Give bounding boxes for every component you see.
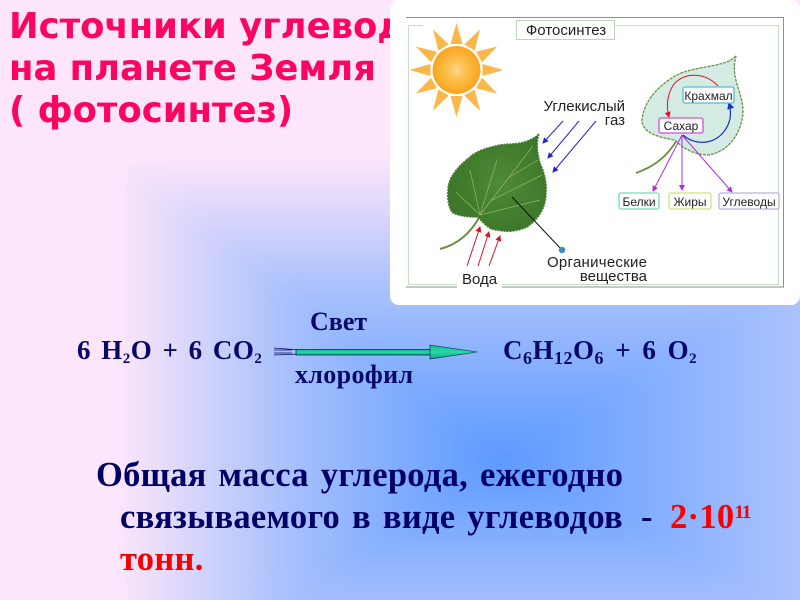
arrow: reaction: [274, 344, 477, 360]
icon: green leaf: [440, 134, 546, 249]
arrows: sugar products: [653, 135, 732, 192]
text: carbon mass statement: тонн.: [120, 540, 204, 578]
pointer: organic substances: [512, 197, 565, 253]
text: carbon mass statement: [96, 456, 750, 578]
label: Углекислый газ: Углекислый: [544, 98, 625, 115]
title: ( фотосинтез): [9, 90, 293, 131]
title: на планете Земля: [9, 48, 376, 89]
label: Органические вещества: вещества: [580, 268, 648, 285]
text: carbon mass statement: Общая масса углерода, ежегодно: [96, 456, 623, 494]
label: Вода: Вода: [462, 271, 498, 288]
heading: Фотосинтез: Фотосинтез: [526, 22, 606, 39]
diagram frame: [406, 18, 784, 288]
title: [9, 6, 390, 131]
label: Углеводы: Углеводы: [722, 195, 776, 209]
text: carbon mass statement: связываемого в виде углеводов: [120, 498, 623, 536]
panel: photosynthesis diagram: [390, 0, 800, 305]
icon: sun: [410, 23, 504, 117]
text: carbon mass statement: 2·1011: [670, 498, 750, 536]
label: Сахар: Сахар: [664, 119, 699, 133]
label: Белки: Белки: [622, 195, 656, 209]
label: Жиры: Жиры: [673, 195, 707, 209]
arrows: water: [467, 227, 500, 266]
label: Органические вещества: [547, 254, 648, 285]
label: Свет: Свет: [310, 307, 367, 336]
small leaf with cycle: [636, 56, 743, 173]
text: carbon mass statement: -: [641, 498, 653, 536]
label: Углекислый газ: [544, 98, 625, 129]
label: Углекислый газ: газ: [605, 112, 625, 129]
arrows: carbon dioxide: [543, 121, 596, 172]
label: Органические вещества: Органические: [547, 254, 647, 271]
label: Крахмал: Крахмал: [684, 89, 733, 103]
label: хлорофил: хлорофил: [295, 360, 413, 389]
equation: reactants: 6 H2O + 6 CO2: [77, 335, 262, 367]
equation: products: C6H12O6 + 6 O2: [503, 335, 697, 368]
label: Жиры: [669, 193, 711, 209]
